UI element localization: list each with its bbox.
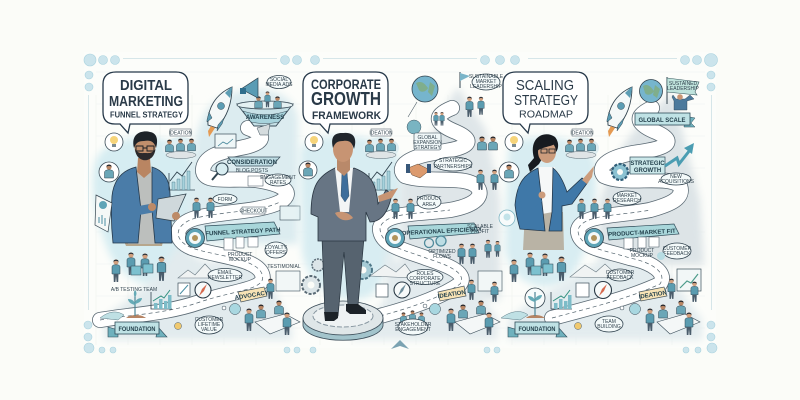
label: market research: MARKET — [617, 193, 637, 199]
icon: megaphone — [240, 78, 258, 98]
banner: global scale: GLOBAL SCALE — [638, 118, 686, 124]
icon: gears — [302, 259, 372, 294]
product mockups — [624, 237, 659, 259]
person: strategist — [515, 134, 594, 250]
banner: funnel strategy path: FUNNEL STRATEGY PATH — [205, 228, 281, 237]
hair — [133, 131, 157, 148]
left arm — [522, 186, 540, 208]
landscape washes — [104, 245, 292, 340]
blouse — [537, 167, 555, 214]
icon: sprout in circle — [501, 288, 545, 320]
binder — [95, 195, 112, 232]
banner: product-market fit — [607, 224, 679, 240]
speech bubble: title: ROADMAP — [519, 108, 573, 120]
label: social media: MEDIA ADS — [266, 82, 293, 88]
banner: funnel strategy path — [205, 222, 281, 241]
trousers — [322, 238, 364, 316]
people: product team — [392, 195, 441, 219]
label: customer feedback road: FEEDBACK — [607, 275, 634, 281]
person: leader on summit — [672, 94, 694, 110]
label: global expansion strategy: EXPANSION — [413, 140, 442, 146]
tag: ideation: IDEATION — [437, 290, 466, 300]
people: board group — [477, 136, 498, 190]
green foothill wash — [508, 260, 702, 340]
meeting table — [245, 300, 300, 335]
label: stakeholder engagement — [395, 310, 432, 335]
banner: foundation — [508, 322, 567, 337]
checkout label: CHECKOUT — [239, 208, 268, 214]
donut chart — [222, 304, 240, 314]
label: engagement rates — [260, 174, 296, 186]
stage: consideration: BLOG POSTS — [236, 168, 269, 174]
mountain and plan board — [570, 264, 620, 297]
label: sustainable market leadership: MARKET — [476, 79, 496, 85]
product mockups: MOCKUP — [229, 257, 252, 263]
speech bubble: title: STRATEGY — [514, 92, 578, 109]
mountain — [400, 87, 500, 300]
upper wash — [186, 89, 298, 244]
label: new acquisitions — [658, 173, 695, 185]
label: sustainable market leadership: LEADERSHIP — [470, 84, 502, 90]
mountain — [598, 92, 704, 265]
icon: small bulb — [574, 322, 582, 330]
speech bubble: title: SCALING — [516, 77, 574, 94]
icon: thought person — [299, 161, 317, 179]
people: product team: AREA — [422, 202, 436, 208]
tag: ideation — [437, 286, 466, 301]
label: global expansion strategy: GLOBAL — [417, 135, 438, 141]
frame icons — [84, 54, 718, 353]
label: market research: RESEARCH — [613, 198, 641, 204]
icon: growth arrow — [665, 143, 694, 166]
shoes — [324, 304, 366, 321]
icon: compass — [195, 282, 211, 298]
bar chart — [151, 290, 172, 309]
label: customer feedback road: CUSTOMER — [606, 270, 635, 276]
testimonial board — [267, 264, 301, 299]
mountain plan and compass — [370, 264, 415, 298]
label: stakeholder engagement: STAKEHOLDER — [395, 322, 432, 328]
label: customer lifetime value: LIFETIME — [198, 322, 221, 328]
mini chart card — [215, 134, 236, 148]
fringe — [537, 140, 556, 151]
stage: consideration — [227, 157, 280, 186]
icon: bulb cloud — [499, 210, 515, 226]
flag and leaders — [434, 72, 484, 126]
label: strategic growth: GROWTH — [634, 168, 661, 174]
icon: thought person — [499, 162, 519, 182]
label: customer lifetime value: VALUE — [201, 327, 218, 333]
label: email newsletter: EMAIL — [217, 270, 233, 276]
jacket — [111, 167, 141, 243]
people: factory team — [458, 224, 500, 264]
jacket — [515, 168, 545, 231]
label: engagement rates: RATES — [270, 180, 287, 186]
ideation cluster — [563, 129, 599, 159]
meeting table — [646, 300, 700, 335]
globe — [407, 76, 438, 134]
icon: optimized flows: FLOWS — [433, 254, 452, 260]
hair — [332, 133, 355, 149]
label: roles and structure: STRUCTURE — [410, 281, 441, 287]
label: customer lifetime value — [195, 316, 224, 334]
icon: thought person — [99, 162, 119, 182]
icon: handshake — [406, 164, 431, 178]
glasses — [136, 146, 154, 151]
people: factory team: PROFIT — [471, 229, 489, 235]
speech bubble: title: DIGITAL — [120, 78, 172, 94]
face — [538, 141, 556, 163]
people: team workshop — [510, 252, 566, 282]
label: global expansion strategy — [413, 133, 442, 151]
trousers — [523, 212, 564, 250]
label: email newsletter — [208, 268, 242, 282]
jacket — [311, 168, 392, 241]
product mockups — [224, 237, 258, 263]
bar chart — [551, 290, 572, 309]
icon: target — [386, 228, 404, 248]
banner: global scale — [635, 113, 695, 127]
meeting table — [447, 300, 500, 335]
label: strategic partnerships: STRATEGIC — [439, 158, 468, 164]
label: strategic partnerships: PARTNERSHIPS — [434, 164, 473, 170]
label: strategic growth: STRATEGIC — [630, 161, 665, 167]
icon: compass — [594, 282, 612, 298]
label: team building: BUILDING — [597, 324, 621, 330]
product mockups: MOCKUP — [631, 253, 654, 259]
icon: target — [186, 228, 204, 248]
shirt and tie — [335, 168, 353, 212]
hair — [528, 134, 558, 172]
tag: ideation: IDEATION — [639, 290, 667, 301]
watercolor wash — [300, 135, 402, 299]
speech bubble: title: GROWTH — [311, 89, 381, 109]
label: sustainable market leadership — [469, 74, 504, 90]
donut chart — [423, 304, 440, 314]
icon: magnifier — [212, 163, 228, 180]
people: factory team: SCALABLE — [467, 224, 494, 230]
label: customer feedback: FEEDBACK — [664, 251, 691, 257]
label: market research — [578, 191, 641, 219]
speech bubble: title: CORPORATE — [311, 77, 381, 92]
product mockups: PRODUCT — [630, 248, 654, 254]
globe — [640, 80, 662, 102]
speech bubble: title — [103, 72, 188, 133]
label: social media: SOCIAL — [270, 77, 288, 83]
label: customer feedback — [657, 243, 692, 260]
glasses — [541, 149, 555, 153]
flag: sustained leadership: LEADERSHIP — [667, 86, 699, 92]
winding road — [380, 108, 480, 316]
icon: lightbulb thought — [305, 133, 323, 151]
neck and head — [337, 156, 350, 176]
panel: scaling strategy roadmap — [499, 72, 704, 340]
tablet — [156, 194, 186, 221]
people: sign-up crowd — [193, 194, 237, 218]
ideation cluster: IDEATION — [169, 130, 193, 136]
flag: sustained leadership: SUSTAINED — [669, 81, 698, 87]
mountain and plan board — [178, 264, 218, 296]
landscape wash — [350, 248, 498, 340]
speech bubble: title — [303, 72, 388, 133]
people: testing team: A/B TESTING TEAM — [111, 287, 157, 293]
banner: product-market fit: PRODUCT-MARKET FIT — [608, 229, 676, 238]
icon: gear — [612, 164, 628, 180]
icon: target — [584, 228, 604, 248]
presentation board — [668, 269, 701, 302]
speech bubble: title: FUNNEL STRATEGY — [110, 110, 184, 120]
pedestal — [303, 301, 383, 340]
icon: lightbulb thought — [105, 133, 123, 151]
winding road — [100, 128, 287, 320]
label: loyalty offers: OFFERS — [266, 250, 287, 256]
board and presenters — [468, 271, 502, 302]
sheet with grid — [84, 52, 716, 348]
person: marketer — [95, 131, 186, 246]
banner: operational efficiency: OPERATIONAL EFFICIENCY — [402, 227, 482, 237]
flag: sustained leadership — [667, 77, 699, 104]
icon: rocket — [607, 87, 632, 137]
label: customer feedback: CUSTOMER — [663, 246, 692, 252]
banner: foundation: FOUNDATION — [118, 327, 156, 333]
label: engagement rates: ENGAGEMENT — [260, 175, 296, 181]
winding road — [552, 108, 681, 318]
label: stakeholder engagement: ENGAGEMENT — [395, 327, 431, 333]
label: strategic growth — [630, 157, 665, 174]
donut chart — [620, 304, 640, 314]
label: roles and structure: CORPORATE — [409, 276, 441, 282]
line chart — [369, 162, 395, 190]
banner: operational efficiency — [402, 223, 482, 239]
label: email newsletter: NEWSLETTER — [208, 275, 242, 281]
compass rose — [391, 340, 409, 349]
tag: advocacy: ADVOCACY — [234, 290, 269, 302]
neck — [137, 158, 151, 178]
people: testing team — [111, 252, 166, 293]
icon: optimized flows — [424, 236, 456, 260]
panel: corporate growth framework — [299, 72, 504, 349]
trousers — [122, 236, 164, 246]
funnel: awareness — [237, 91, 293, 135]
ideation cluster: IDEATION — [369, 130, 393, 136]
icon: lightbulb thought — [505, 133, 523, 151]
label: team building: TEAM — [602, 319, 616, 325]
person: executive — [311, 133, 398, 321]
beard — [135, 149, 156, 160]
ideation cluster — [162, 129, 200, 159]
banner: foundation: FOUNDATION — [518, 327, 556, 333]
label: roles and structure: ROLES — [417, 271, 434, 277]
banner: foundation — [108, 322, 167, 337]
stage: consideration: CONSIDERATION — [227, 160, 277, 166]
people: product team: PRODUCT — [417, 196, 441, 202]
hands — [335, 212, 353, 220]
icon: rocket — [207, 87, 232, 137]
label: team building — [595, 316, 623, 332]
checkout label — [239, 206, 300, 220]
icon: sprout — [100, 290, 146, 320]
label: sustainable market leadership: SUSTAINABLE — [469, 74, 504, 80]
testimonial board: TESTIMONIAL — [267, 264, 301, 270]
watercolor wash — [505, 137, 596, 287]
label: new acquisitions: ACQUISITIONS — [658, 179, 695, 185]
label: social media — [266, 76, 293, 88]
label: customer lifetime value: CUSTOMER — [195, 317, 224, 323]
icon: optimized flows: OPTIMIZED — [428, 249, 456, 255]
label: loyalty offers — [265, 242, 288, 258]
speech bubble: title: FRAMEWORK — [312, 110, 381, 122]
icon: small bulb — [174, 322, 182, 330]
line chart — [169, 162, 195, 190]
speech bubble: title: MARKETING — [109, 94, 183, 110]
ideation cluster — [363, 129, 399, 159]
head — [134, 134, 156, 160]
label: new acquisitions: NEW — [670, 174, 682, 180]
funnel: awareness: AWARENESS — [246, 115, 284, 121]
label: roles and structure — [407, 270, 443, 287]
hand — [582, 166, 594, 184]
speech bubble: title — [503, 72, 588, 133]
shirt — [128, 172, 160, 244]
label: global expansion strategy: STRATEGY — [414, 145, 441, 151]
panel: digital marketing funnel strategy — [93, 72, 301, 340]
arm and hand — [118, 190, 158, 211]
label: strategic partnerships — [434, 157, 473, 171]
label: loyalty offers: LOYALTY — [265, 245, 288, 251]
people: sign-up crowd: FORM — [218, 197, 232, 203]
watercolor wash — [93, 137, 198, 285]
label: customer feedback road — [606, 269, 635, 281]
product mockups: PRODUCT — [228, 252, 252, 258]
ideation cluster: IDEATION — [570, 130, 594, 136]
